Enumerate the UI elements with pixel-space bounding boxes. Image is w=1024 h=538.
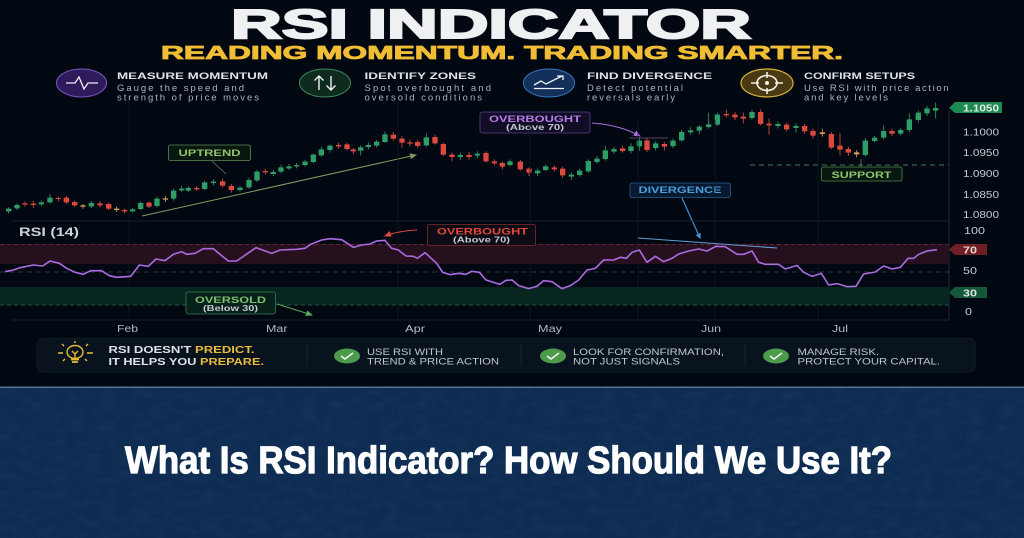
tip: RSI prepares: RSI DOESN'T PREDICT. [108, 345, 255, 356]
month labels: Apr [405, 324, 426, 335]
tip: look for confirmation [540, 347, 724, 366]
feature: identify zones: IDENTIFY ZONES [364, 71, 476, 82]
feature: identify zones: Spot overbought and [364, 83, 491, 94]
feature: confirm setups [741, 69, 948, 104]
feature: find divergence: reversals early [587, 92, 675, 104]
label: overbought on price [480, 112, 668, 138]
price axis: 1.0950 [963, 148, 1000, 159]
label: overbought on price: OVERBOUGHT [489, 114, 581, 125]
label: overbought on RSI: OVERBOUGHT [437, 226, 528, 238]
feature: identify zones [300, 69, 491, 104]
bottom caption banner [0, 386, 1024, 538]
price axis: 1.0800 [963, 210, 1000, 221]
overbought band [0, 244, 949, 264]
support line and label [750, 159, 949, 181]
RSI heading: RSI (14) [19, 225, 79, 239]
tip: look for confirmation: LOOK FOR CONFIRMATION, [573, 347, 724, 357]
tip: use RSI with trend: TREND & PRICE ACTION [367, 356, 499, 366]
tip: RSI prepares: IT HELPS YOU PREPARE. [108, 357, 264, 368]
month labels: Mar [266, 324, 288, 335]
price axis: 1.0850 [963, 190, 1000, 201]
divergence trend line [638, 238, 777, 248]
month labels: May [538, 324, 562, 335]
month labels [117, 324, 848, 335]
tip: use RSI with trend [334, 347, 499, 366]
label: divergence: DIVERGENCE [638, 185, 722, 195]
tip: manage risk: MANAGE RISK. [798, 347, 879, 357]
RSI axis: 0 [965, 307, 973, 318]
label: overbought on RSI [385, 224, 536, 246]
candlesticks [9, 103, 936, 213]
icon: check [763, 348, 789, 364]
feature: identify zones: oversold conditions [364, 92, 482, 104]
caption: What Is RSI Indicator? How Should We Use It? [125, 440, 892, 482]
RSI axis: 100 [964, 226, 986, 237]
icon: lightbulb [58, 341, 93, 362]
price chart [9, 102, 1002, 320]
tip: look for confirmation: NOT JUST SIGNALS [573, 356, 680, 366]
feature: find divergence: Detect potential [587, 83, 683, 94]
label: uptrend: UPTREND [178, 148, 241, 159]
oversold band [0, 287, 949, 305]
icon: check [334, 348, 360, 364]
subtitle: READING MOMENTUM. TRADING SMARTER. [161, 43, 843, 63]
tip: manage risk [763, 347, 940, 366]
footer tips panel [37, 338, 975, 372]
month labels: Feb [117, 324, 139, 335]
price axis: 1.1000 [963, 128, 1000, 138]
RSI axis: 50 [963, 266, 978, 277]
label: uptrend [168, 145, 250, 174]
current price tag: 1.1050 [963, 104, 1000, 114]
uptrend arrow [142, 155, 416, 216]
label: oversold on RSI [186, 292, 312, 315]
feature: confirm setups: and key levels [804, 92, 888, 104]
support line and label: SUPPORT [832, 170, 892, 181]
tip: use RSI with trend: USE RSI WITH [367, 347, 443, 357]
RSI line [5, 239, 937, 289]
label: oversold on RSI: (Below 30) [203, 304, 258, 313]
tip: RSI prepares [108, 345, 264, 368]
price axis: 1.0900 [963, 169, 1000, 180]
icon: target crosshair [741, 69, 793, 97]
feature: confirm setups: Use RSI with price action [804, 83, 948, 94]
label: overbought on price: (Above 70) [506, 123, 564, 132]
feature: find divergence: FIND DIVERGENCE [587, 71, 712, 82]
label: oversold on RSI: OVERSOLD [195, 295, 266, 306]
feature: measure momentum: Gauge the speed and [117, 83, 244, 94]
feature: measure momentum: MEASURE MOMENTUM [117, 71, 268, 82]
feature: measure momentum: strength of price moves [117, 92, 259, 104]
RSI panel [0, 100, 987, 335]
tag: 70: 70 [963, 244, 977, 256]
tip: manage risk: PROTECT YOUR CAPITAL. [798, 356, 940, 366]
icon: up and down arrows [300, 69, 350, 97]
price axis [949, 102, 1002, 320]
label: divergence [630, 183, 730, 238]
icon: trend chart [524, 69, 574, 97]
current price tag [949, 102, 1002, 114]
label: overbought on RSI: (Above 70) [453, 236, 510, 244]
feature: find divergence [524, 69, 712, 104]
title: RSI INDICATOR [231, 1, 751, 47]
icon: pulse [56, 69, 106, 97]
icon: check [540, 348, 566, 364]
dark chart background [0, 0, 1024, 388]
feature: confirm setups: CONFIRM SETUPS [804, 71, 915, 82]
month labels: Jul [832, 324, 848, 335]
RSI axis [949, 226, 987, 318]
month labels: Jun [701, 324, 721, 335]
feature: measure momentum [56, 69, 268, 104]
tag: 30: 30 [963, 288, 977, 300]
